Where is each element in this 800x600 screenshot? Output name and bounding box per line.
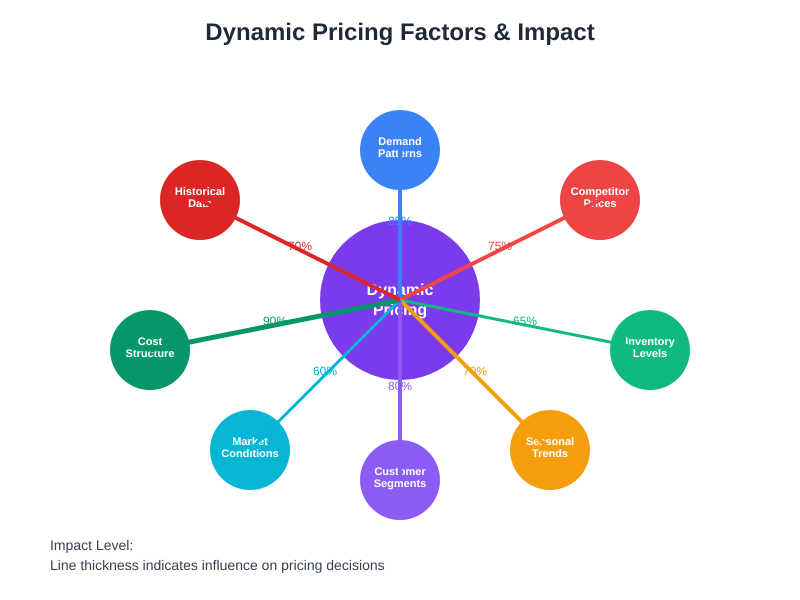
factor: Customer Segments <box>360 300 440 520</box>
factor: Customer Segments: 80% <box>388 379 412 393</box>
central hub: Dynamic Pricing: Pricing <box>373 302 427 319</box>
factor: Demand Patterns <box>360 110 440 300</box>
factor: Customer Segments: Segments <box>374 478 426 490</box>
factor: Inventory Levels <box>400 300 690 390</box>
factor: Inventory Levels: Inventory <box>625 336 676 348</box>
factor: Inventory Levels: Levels <box>633 348 667 360</box>
factor: Cost Structure: Cost <box>138 336 163 348</box>
factor: Historical Data: Historical <box>175 186 225 198</box>
factor: Competitor Prices: Competitor <box>571 186 630 198</box>
factor: Competitor Prices: Prices <box>583 198 617 210</box>
factor: Customer Segments: Customer <box>374 466 426 478</box>
factor: Seasonal Trends <box>400 300 590 490</box>
factor: Inventory Levels: 65% <box>513 314 537 328</box>
factor: Historical Data: Data <box>188 198 213 210</box>
legend: Line thickness indicates influence on pricing decisions <box>50 557 385 573</box>
legend: Impact Level: <box>50 537 133 553</box>
legend <box>50 537 385 573</box>
factor: Seasonal Trends: 70% <box>463 364 487 378</box>
factor: Cost Structure <box>110 300 400 390</box>
factor: Demand Patterns: Patterns <box>378 148 422 160</box>
factor: Market Conditions: 60% <box>313 364 337 378</box>
title: Dynamic Pricing Factors & Impact <box>205 19 595 46</box>
factor: Cost Structure: Structure <box>126 348 174 360</box>
factor: Seasonal Trends: Seasonal <box>526 436 574 448</box>
factor: Cost Structure: 90% <box>263 314 287 328</box>
factor: Market Conditions: Conditions <box>221 448 279 460</box>
factor: Historical Data: 70% <box>288 239 312 253</box>
factor: Demand Patterns: Demand <box>378 136 422 148</box>
factor: Competitor Prices <box>400 160 640 300</box>
central hub: Dynamic Pricing <box>320 220 480 380</box>
factor: Market Conditions <box>210 300 400 490</box>
factor: Seasonal Trends: Trends <box>532 448 568 460</box>
factor: Demand Patterns: 85% <box>388 214 412 228</box>
factor: Historical Data <box>160 160 400 300</box>
central hub: Dynamic Pricing: Dynamic <box>367 282 433 299</box>
factor: Market Conditions: Market <box>232 436 268 448</box>
factor: Competitor Prices: 75% <box>488 239 512 253</box>
